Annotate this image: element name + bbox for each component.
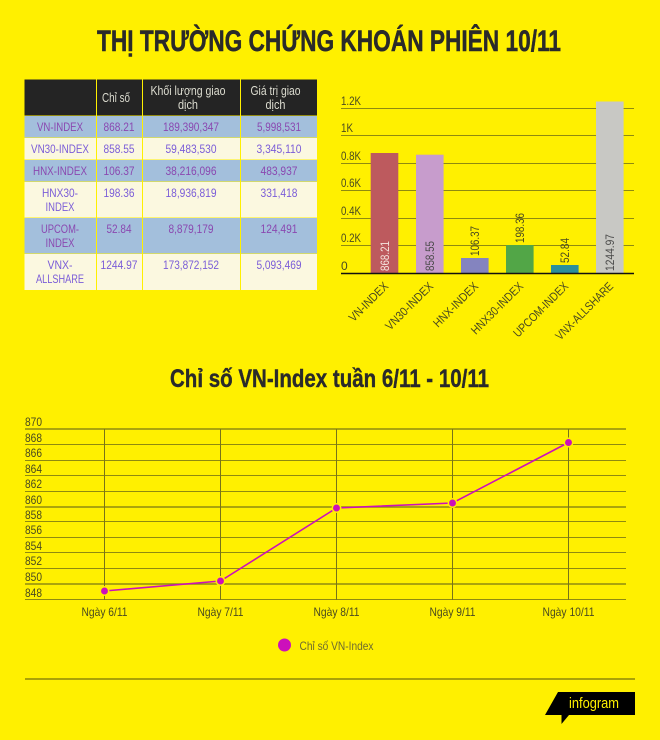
y axis labels: 848 <box>25 586 42 600</box>
row: HNX-INDEX: 38,216,096 <box>166 164 217 178</box>
panel: data table <box>24 79 317 290</box>
row: VN30-INDEX: 59,483,530 <box>166 142 217 156</box>
x axis labels: Ngày 6/11 <box>82 605 128 619</box>
y axis labels <box>341 94 361 273</box>
bar chart <box>341 94 634 343</box>
x axis labels <box>82 605 595 619</box>
data points <box>100 438 573 595</box>
bars <box>371 102 624 273</box>
row: VN-INDEX <box>37 120 301 134</box>
x axis labels: HNX-INDEX <box>430 279 481 330</box>
row: UPCOM-INDEX <box>41 222 298 250</box>
row: HNX30-INDEX: 18,936,819 <box>166 186 217 200</box>
y axis labels: 0.6K <box>341 176 361 190</box>
x axis labels: VNX-ALLSHARE <box>552 279 616 343</box>
row: VN30-INDEX <box>31 142 302 156</box>
icon: infogram logo <box>545 692 635 724</box>
row: HNX30-INDEX: 198.36 <box>104 186 135 200</box>
row: VN-INDEX: 5,998,531 <box>257 120 301 134</box>
data line <box>104 442 568 591</box>
bar value labels: 858.55 <box>423 241 437 271</box>
y axis labels: 870 <box>25 415 42 429</box>
y axis labels: 850 <box>25 570 42 584</box>
y axis labels: 858 <box>25 508 42 522</box>
y axis labels: 856 <box>25 523 42 537</box>
x axis labels: Ngày 7/11 <box>198 605 244 619</box>
line chart <box>25 415 626 619</box>
row: HNX-INDEX: 106.37 <box>104 164 135 178</box>
x axis labels: VN-INDEX <box>346 279 391 324</box>
row: HNX30-INDEX: HNX30- <box>42 186 78 200</box>
y axis labels: 866 <box>25 446 42 460</box>
x axis labels: Ngày 8/11 <box>314 605 360 619</box>
bar value labels <box>378 213 617 271</box>
row: VN30-INDEX: VN30-INDEX <box>31 142 89 156</box>
y axis labels: 862 <box>25 477 42 491</box>
table row backgrounds <box>24 116 317 290</box>
row: HNX30-INDEX: 331,418 <box>260 186 298 200</box>
row: VNX-ALLSHARE: ALLSHARE <box>36 272 84 286</box>
row: VN-INDEX: 868.21 <box>104 120 135 134</box>
table header: Khối lượng giao <box>150 84 226 98</box>
x axis labels: Ngày 10/11 <box>542 605 595 619</box>
row: HNX-INDEX: 483,937 <box>260 164 298 178</box>
legend <box>278 638 374 653</box>
y axis labels: 864 <box>25 462 42 476</box>
row: VNX-ALLSHARE: 5,093,469 <box>256 258 302 272</box>
bar value labels: 1244.97 <box>603 234 617 271</box>
table header: dịch <box>178 98 198 112</box>
legend: Chỉ số VN-Index <box>300 639 374 653</box>
row: HNX-INDEX: HNX-INDEX <box>33 164 87 178</box>
row: UPCOM-INDEX: 8,879,179 <box>168 222 214 236</box>
y axis labels: 860 <box>25 493 42 507</box>
y axis labels: 1.2K <box>341 94 361 108</box>
y axis labels: 0.2K <box>341 231 361 245</box>
x axis labels: VN30-INDEX <box>382 279 436 333</box>
x axis labels <box>346 279 616 343</box>
y axis labels <box>25 415 42 600</box>
row: VNX-ALLSHARE: 173,872,152 <box>163 258 219 272</box>
y axis labels: 0.4K <box>341 204 361 218</box>
row: HNX-INDEX <box>33 164 298 178</box>
row: HNX30-INDEX: INDEX <box>46 200 74 214</box>
heading: weekly chart: Chỉ số VN-Index tuần 6/11 - 10/11 <box>170 365 489 393</box>
row: UPCOM-INDEX: UPCOM- <box>41 222 79 236</box>
bar value labels: 198.36 <box>513 213 527 243</box>
row: VNX-ALLSHARE <box>36 258 302 286</box>
y axis labels: 0.8K <box>341 149 361 163</box>
table header: Giá trị giao <box>250 84 301 98</box>
row: HNX30-INDEX <box>42 186 298 214</box>
table header <box>24 80 317 116</box>
x axis labels: UPCOM-INDEX <box>510 279 571 340</box>
row: VNX-ALLSHARE: 1244.97 <box>100 258 138 272</box>
y axis labels: 1K <box>341 121 353 135</box>
row: VN30-INDEX: 858.55 <box>104 142 135 156</box>
x axis line <box>341 272 634 274</box>
bar value labels: 868.21 <box>378 241 392 271</box>
row: UPCOM-INDEX: INDEX <box>46 236 74 250</box>
row: VN-INDEX: 189,390,347 <box>163 120 219 134</box>
row: UPCOM-INDEX: 52.84 <box>106 222 132 236</box>
y axis labels: 868 <box>25 431 42 445</box>
y axis labels: 854 <box>25 539 42 553</box>
row: VNX-ALLSHARE: VNX- <box>48 258 73 272</box>
table header: dịch <box>266 98 286 112</box>
bar value labels: 106.37 <box>468 226 482 256</box>
icon: infogram logo: infogram <box>569 695 619 712</box>
table header: Chỉ số <box>102 91 130 105</box>
x axis labels: Ngày 9/11 <box>430 605 476 619</box>
row: VN30-INDEX: 3,345,110 <box>256 142 302 156</box>
y axis labels: 0 <box>341 259 348 273</box>
y axis labels: 852 <box>25 554 42 568</box>
x axis labels: HNX30-INDEX <box>468 279 526 337</box>
bar value labels: 52.84 <box>558 238 572 263</box>
row: VN-INDEX: VN-INDEX <box>37 120 83 134</box>
row: UPCOM-INDEX: 124,491 <box>260 222 298 236</box>
